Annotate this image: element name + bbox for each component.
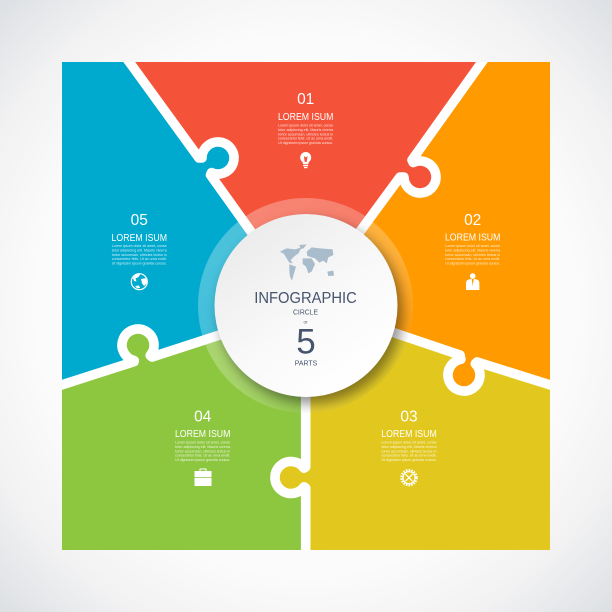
centre circle <box>214 214 398 397</box>
text block 05: tetur adipiscing elit. Mauris viverra <box>112 248 167 252</box>
circle shadow <box>219 220 403 404</box>
icon: light bulb <box>300 152 311 168</box>
icon: world map <box>280 244 334 281</box>
puzzle knob: yellow into green <box>280 466 306 489</box>
icon: businessman <box>466 273 479 290</box>
text block 01 <box>278 91 333 145</box>
text block 03: Ut dignissim ipsum gravida cursus. <box>382 458 436 462</box>
text block 02: consectetur felis. Ut ac urna endit. <box>445 257 500 261</box>
text block 03: 03 <box>400 409 418 426</box>
icon: gear <box>401 470 417 485</box>
text block 05: Ut dignissim ipsum gravida cursus. <box>112 262 167 266</box>
icon: globe <box>131 274 147 290</box>
translucent ring <box>198 198 413 413</box>
panel: yellow piece <box>309 337 550 550</box>
text block 03: tetur adipiscing elit. Mauris viverra <box>382 445 436 449</box>
white puzzle separators <box>52 52 560 560</box>
text block 05: LOREM ISUM <box>112 233 167 244</box>
subtitle: circle: CIRCLE <box>293 307 318 316</box>
text block 01: LOREM ISUM <box>278 112 333 123</box>
puzzle knob: red into orange <box>402 163 432 188</box>
text block 04: tortor accumsan, ultricies lectus in <box>175 449 230 453</box>
text block 02: tetur adipiscing elit. Mauris viverra <box>445 248 500 252</box>
text block 01: Ut dignissim ipsum gravida cursus. <box>278 141 333 145</box>
text block 04: consectetur felis. Ut ac urna endit. <box>175 454 230 458</box>
text block 02: tortor accumsan, ultricies lectus in <box>445 253 500 257</box>
puzzle knob: green into blue <box>126 334 150 360</box>
text block 02: Lorem ipsum dolor sit amet, conse <box>445 244 500 248</box>
text block 03 <box>381 409 437 462</box>
text block 03: Lorem ipsum dolor sit amet, conse <box>382 440 436 444</box>
text block 04: Ut dignissim ipsum gravida cursus. <box>175 458 230 462</box>
text block 04: tetur adipiscing elit. Mauris viverra <box>175 445 230 449</box>
text block 05: consectetur felis. Ut ac urna endit. <box>112 257 167 261</box>
text block 04: LOREM ISUM <box>175 429 230 440</box>
text block 02 <box>445 212 500 266</box>
panel: red piece <box>135 62 476 230</box>
text block 02: LOREM ISUM <box>445 232 500 244</box>
text block 01: consectetur felis. Ut ac urna endit. <box>278 137 333 141</box>
panel: orange piece <box>364 62 550 380</box>
puzzle knob: orange into yellow <box>452 357 476 386</box>
text block 02: Ut dignissim ipsum gravida cursus. <box>445 262 500 266</box>
panel: blue piece <box>62 62 248 380</box>
puzzle square <box>52 52 560 560</box>
text block 03: LOREM ISUM <box>381 429 437 440</box>
text block 05 <box>112 212 167 266</box>
subtitle: parts: PARTS <box>295 359 317 368</box>
text block 05: tortor accumsan, ultricies lectus in <box>112 253 167 257</box>
puzzle knob: blue into red <box>202 146 230 170</box>
text block 01: tortor accumsan, ultricies lectus in <box>278 132 333 136</box>
text block 03: consectetur felis. Ut ac urna endit. <box>382 454 436 458</box>
text block 05: 05 <box>131 212 148 229</box>
icon: briefcase <box>194 469 212 486</box>
panel: green piece <box>62 340 301 550</box>
subtitle: or: or <box>303 320 308 324</box>
text block 03: tortor accumsan, ultricies lectus in <box>382 449 436 453</box>
text block 04: 04 <box>194 409 212 426</box>
text block 01: Lorem ipsum dolor sit amet, conse <box>278 124 333 128</box>
text block 05: Lorem ipsum dolor sit amet, conse <box>112 244 167 248</box>
text block 04 <box>175 409 230 462</box>
text block 01: tetur adipiscing elit. Mauris viverra <box>278 128 333 132</box>
big number 5: 5 <box>296 322 316 362</box>
title text: INFOGRAPHIC <box>254 290 357 307</box>
text block 01: 01 <box>297 91 314 108</box>
text block 02: 02 <box>464 212 481 229</box>
text block 04: Lorem ipsum dolor sit amet, conse <box>175 440 230 444</box>
